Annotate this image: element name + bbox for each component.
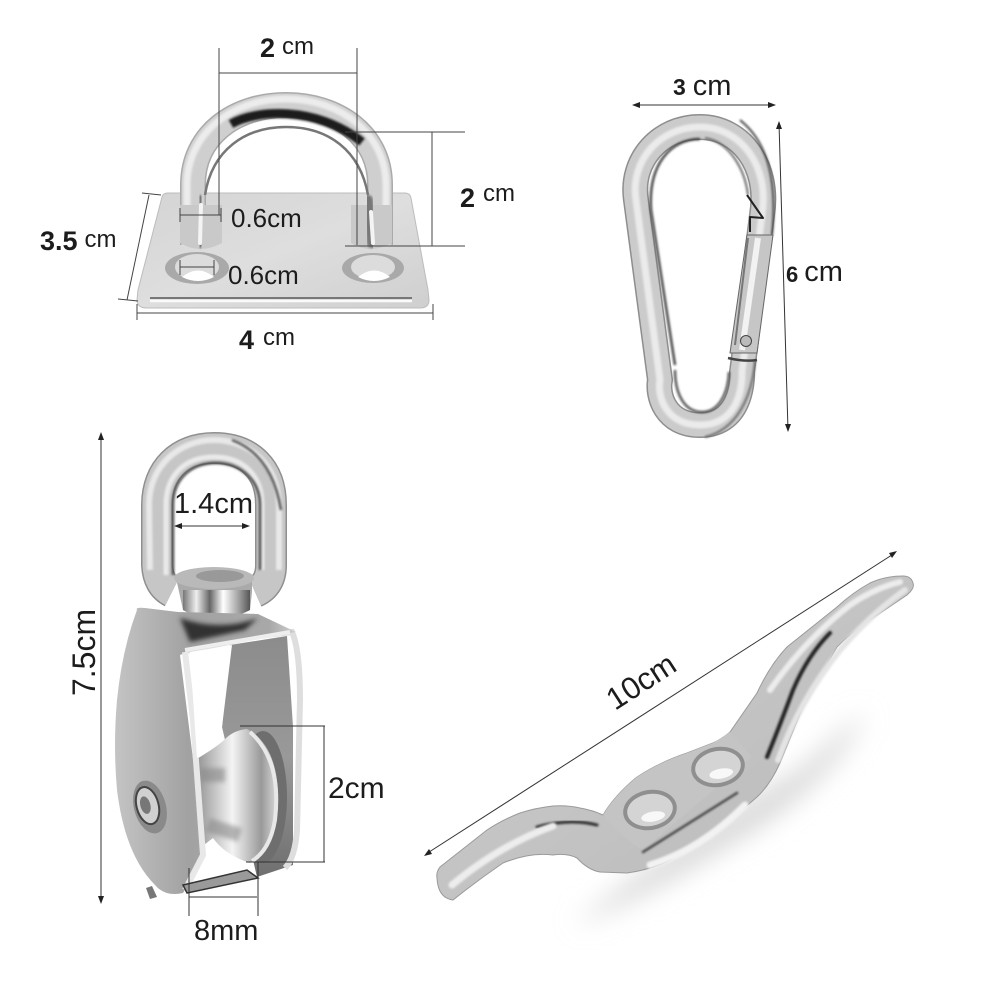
cleat highlights: [452, 582, 905, 885]
label: 8mm: 8mm: [194, 915, 258, 947]
label: 2 cm top: 2: [260, 33, 275, 63]
swivel barrel: [174, 567, 254, 619]
label: 4 cm: cm: [263, 324, 295, 351]
label: 2cm pulley: 2cm: [328, 772, 385, 805]
U-bolt: [180, 99, 392, 249]
label: 6 cm: cm: [804, 256, 843, 288]
gate: [730, 235, 773, 353]
swivel eye: [149, 440, 281, 592]
label: 0.6cm lower: 0.6cm: [228, 260, 299, 290]
dimension lines: eye plate: [118, 48, 465, 320]
cleat body: [437, 576, 913, 900]
carabiner hook: [635, 120, 773, 437]
bottom pin tip: [146, 886, 157, 899]
cleat: [437, 576, 913, 925]
bottom pin: [183, 870, 258, 893]
label: 1.4cm: 1.4cm: [174, 488, 253, 520]
sheave wheel: [195, 729, 287, 863]
label: 4 cm: 4: [239, 325, 254, 355]
label: 3.5 cm: cm: [85, 226, 117, 253]
label: 3.5 cm: 3.5: [40, 226, 78, 256]
label: 7.5cm: 7.5cm: [66, 609, 102, 696]
cleat plate: [603, 732, 752, 850]
cleat shadow: [575, 712, 865, 925]
label: 2 cm top: cm: [282, 33, 314, 60]
back cheek plate: [222, 636, 293, 877]
dimension lines: carabiner: [632, 102, 791, 432]
plate: [137, 193, 429, 308]
frame right edge: [180, 632, 300, 868]
eye plate hardware: [137, 99, 429, 308]
axle bolt: [128, 777, 172, 837]
label: 6 cm: 6: [786, 262, 798, 287]
label: 10cm: 10cm: [600, 646, 682, 717]
cleat holes: [620, 743, 748, 834]
label: 2 cm right: cm: [483, 180, 515, 207]
dimension lines: pulley: [98, 432, 325, 916]
pulley: [115, 440, 300, 899]
window: [190, 645, 232, 758]
label: 2 cm right: 2: [460, 183, 475, 213]
label: 3 cm: 3cm: [673, 70, 731, 102]
label: 0.6cm upper: 0.6cm: [231, 203, 302, 233]
front cheek plate and bridge: [115, 608, 296, 894]
dimension line: cleat: [424, 551, 897, 856]
